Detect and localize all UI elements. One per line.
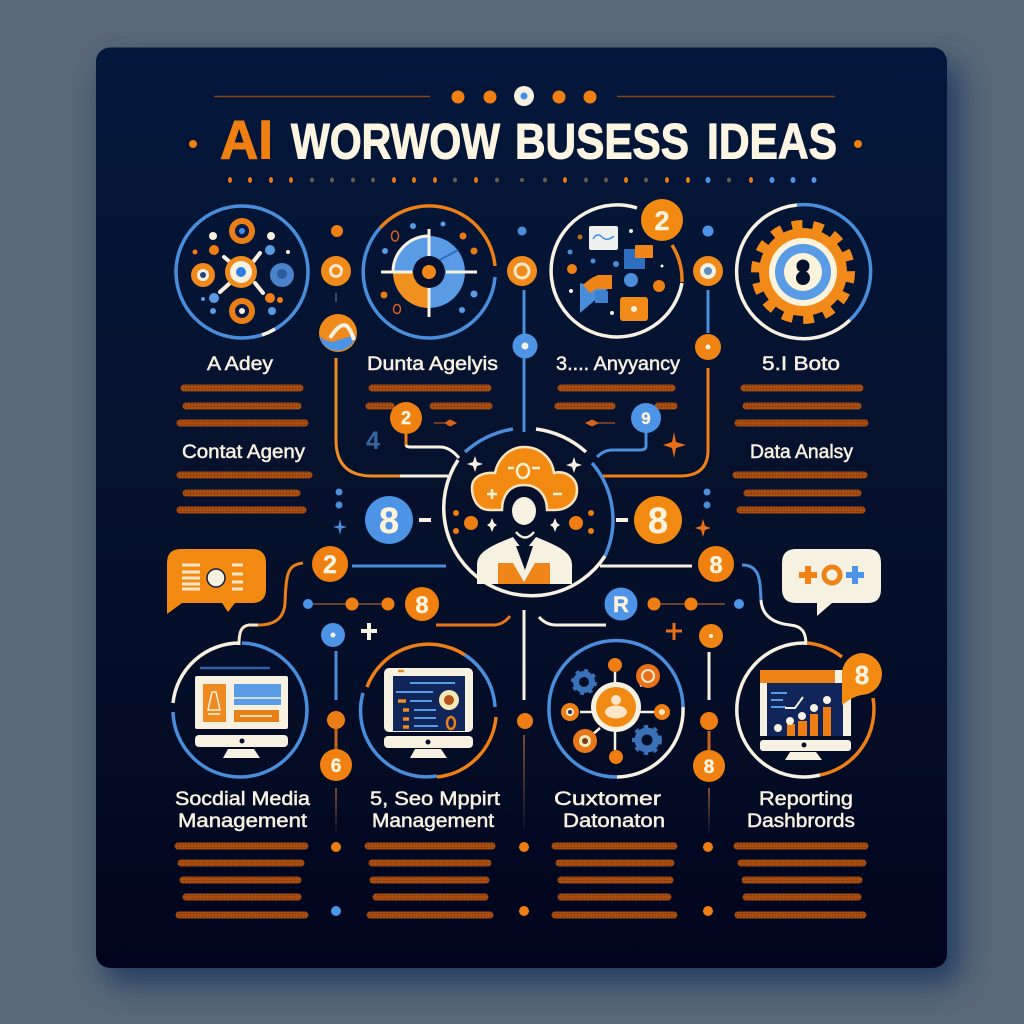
label: Reporting Dashboards: Reporting xyxy=(759,789,853,810)
text bars xyxy=(737,846,865,915)
icon circle: network nodes xyxy=(176,206,308,338)
label: Customer Automation xyxy=(554,789,665,832)
icon: blue number 4 glyph: 4 xyxy=(366,427,380,455)
hub dots xyxy=(453,510,594,534)
icon circle: gear xyxy=(737,205,871,339)
label: Social Media Management: Socdial Media xyxy=(175,789,310,810)
label: Data Analsy: Data Analsy xyxy=(750,442,853,463)
central hub xyxy=(444,429,613,596)
text bars xyxy=(368,846,492,915)
icon circle: customer automation xyxy=(549,640,683,777)
badge: blue 8 left: 8 xyxy=(379,500,399,541)
badge: 2 and blue link xyxy=(312,546,446,582)
icon circle: data analysis wheel xyxy=(363,206,495,338)
label: Customer Automation: Cuxtomer xyxy=(554,789,662,810)
connector to social media xyxy=(239,563,303,645)
arrow small right xyxy=(586,420,615,426)
left lower column nodes xyxy=(320,623,377,916)
badge: number 2 on content icon: 2 xyxy=(654,206,670,236)
panel shadow xyxy=(104,62,960,984)
timeline left xyxy=(303,587,510,625)
text bars xyxy=(180,388,305,423)
connector to reporting xyxy=(742,565,806,645)
text bars xyxy=(558,388,674,406)
icon circle: social media monitor xyxy=(173,643,307,777)
connector column center-top xyxy=(507,226,538,432)
title side dots xyxy=(189,140,862,148)
person xyxy=(512,497,536,525)
connector column left-top xyxy=(319,225,448,476)
timeline right xyxy=(539,588,744,625)
label: A Adey: A Adey xyxy=(207,354,274,375)
label: Social Media Management xyxy=(175,789,310,832)
right lower column nodes: 8 xyxy=(704,757,714,778)
label: SEO Management xyxy=(370,789,501,832)
title: IDEAS xyxy=(707,114,837,170)
badge: blue 8 left xyxy=(333,488,431,544)
title: AI xyxy=(220,108,273,170)
connector column right-top xyxy=(602,226,723,476)
title xyxy=(220,108,837,170)
timeline left: 8 xyxy=(415,592,429,619)
speech bubble right xyxy=(782,549,881,616)
label: Reporting Dashboards: Dashbrords xyxy=(747,811,855,832)
cloud xyxy=(472,447,577,510)
text bars xyxy=(555,846,674,915)
badge: number 2: 2 xyxy=(401,408,411,428)
icon: orange star xyxy=(663,432,686,458)
badge: 8 speech on reporting xyxy=(842,653,882,705)
title: BUSESS xyxy=(515,114,689,170)
label: 5.I Boto: 5.I Boto xyxy=(762,354,840,375)
text bars xyxy=(736,475,864,510)
badge: 8 speech on reporting: 8 xyxy=(855,660,869,690)
label: Social Media Management: Management xyxy=(178,811,308,832)
main dark panel xyxy=(96,48,947,968)
right lower column nodes xyxy=(666,623,725,916)
timeline right: R xyxy=(613,592,629,617)
icon circle: content agency xyxy=(551,205,682,337)
badge: orange 8 right: 8 xyxy=(648,500,668,541)
badge: number 2 xyxy=(390,402,459,458)
label: SEO Management: 5, Seo Mppirt xyxy=(370,789,501,810)
label: 3.... Anyyancy: 3.... Anyyancy xyxy=(556,354,681,375)
badge: 8 and cream link: 8 xyxy=(709,552,723,579)
dotted divider xyxy=(228,177,816,183)
speech bubble left xyxy=(167,549,266,614)
label: Customer Automation: Datonaton xyxy=(563,811,665,832)
label: SEO Management: Management xyxy=(372,811,495,832)
badge: 8 and cream link xyxy=(600,546,734,582)
text bars xyxy=(738,388,865,423)
badge: blue connector: 9 xyxy=(641,409,651,428)
left lower column nodes: 6 xyxy=(331,756,341,777)
header ornament xyxy=(214,86,835,106)
text bars xyxy=(369,388,489,406)
badge: 2 and blue link: 2 xyxy=(323,551,337,579)
text bars xyxy=(180,475,309,510)
label: Dunta Agelyis: Dunta Agelyis xyxy=(367,354,498,375)
center vertical line and dots xyxy=(517,610,533,916)
title: WORWOW xyxy=(291,114,501,170)
text bars xyxy=(178,846,305,915)
arrow small left xyxy=(434,420,456,426)
badge: orange 8 right xyxy=(616,488,711,544)
icon circle: reporting monitor xyxy=(737,643,874,777)
badge: blue connector xyxy=(597,403,661,457)
label: Reporting Dashboards xyxy=(747,789,855,832)
label: Contat Ageny: Contat Ageny xyxy=(182,442,306,463)
badge: number 2 on content icon xyxy=(641,199,683,241)
icon circle: SEO monitor xyxy=(361,644,496,777)
